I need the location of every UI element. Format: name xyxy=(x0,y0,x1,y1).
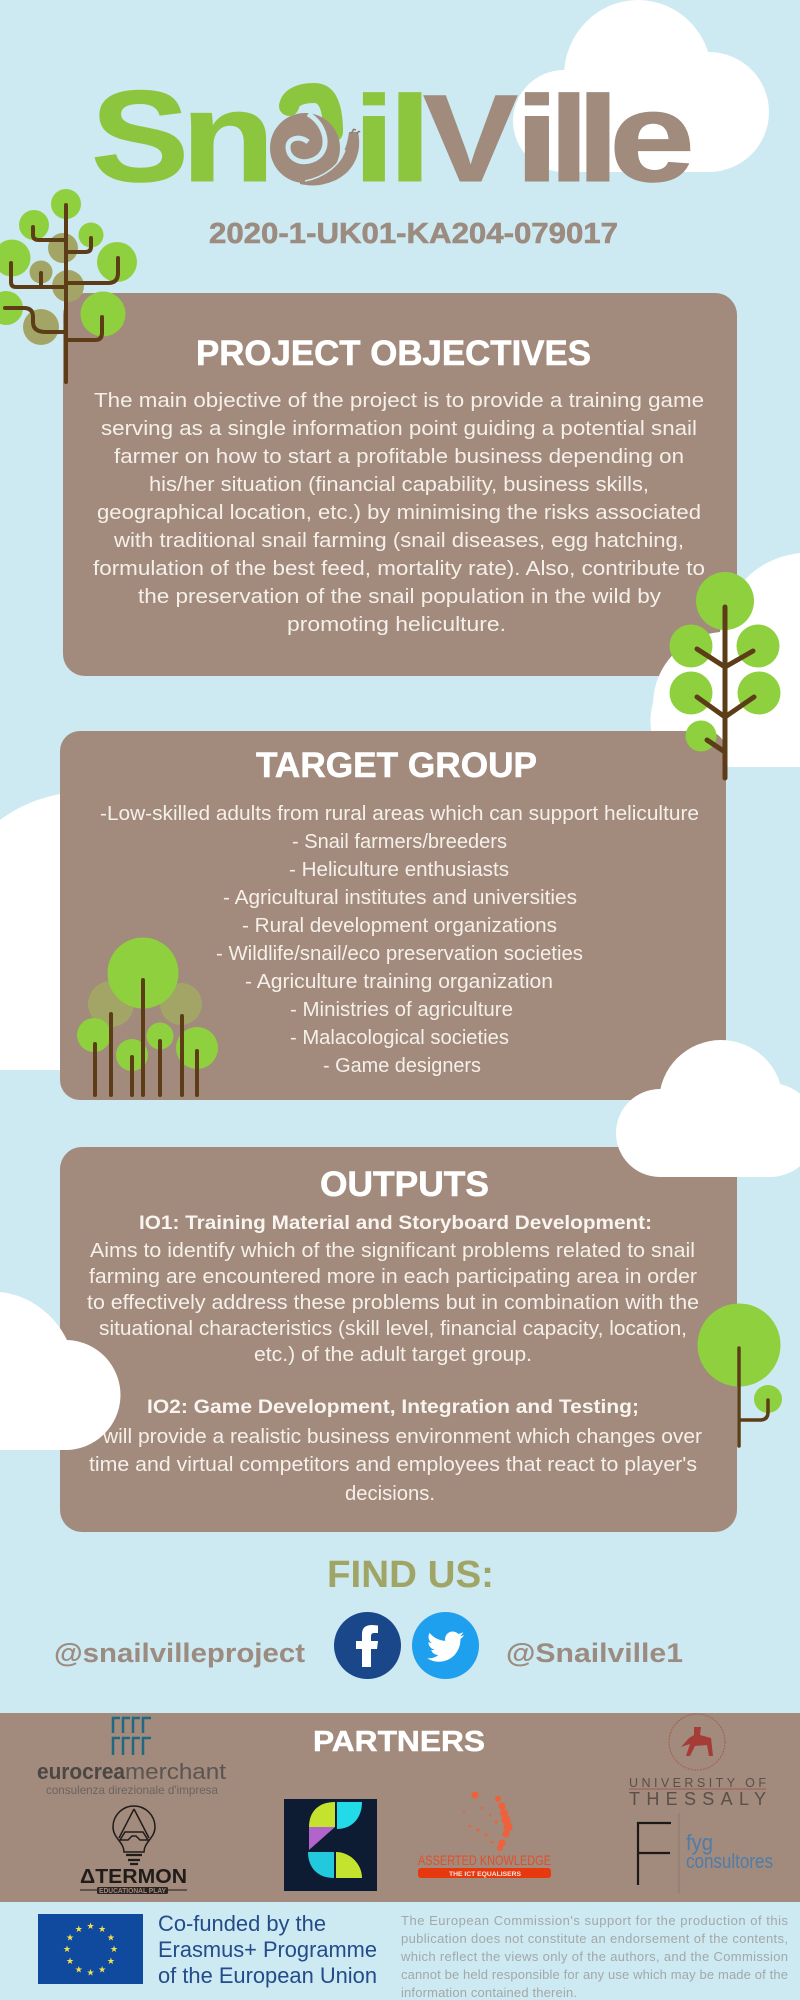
heading: find us: FIND US: xyxy=(327,1554,494,1596)
icon: twitter xyxy=(412,1612,479,1679)
text: disclaimer: cannot be held responsible for any use which may be made of the xyxy=(401,1967,788,1982)
body text: objectives xyxy=(93,389,705,636)
list: target groups: - Rural development organizations xyxy=(242,914,557,937)
cloud: right of objectives xyxy=(650,553,800,767)
icon: EU flag: ★ xyxy=(110,1944,118,1954)
list: target groups: - Malacological societies xyxy=(290,1026,509,1049)
logo letter: a as green arc xyxy=(289,93,333,132)
icon: EU flag: ★ xyxy=(86,1968,95,1978)
text: erasmus co-funding xyxy=(158,1911,377,1988)
icon: EU flag: ★ xyxy=(75,1964,83,1974)
text: disclaimer xyxy=(400,1913,788,2000)
logo: asserted knowledge: ASSERTED KNOWLEDGE xyxy=(418,1852,551,1868)
list: target groups: - Wildlife/snail/eco preservation societies xyxy=(216,942,583,965)
logo: university of thessaly: UNIVERSITY OF xyxy=(629,1776,766,1790)
icon: EU flag: ★ xyxy=(86,1921,95,1931)
tree: right of outputs xyxy=(698,1304,782,1446)
cloud: left of target group xyxy=(0,794,100,1070)
subheading: IO1: IO1: Training Material and Storyboard Development: xyxy=(139,1213,652,1234)
logo: asserted knowledge: THE ICT EQUALISERS xyxy=(449,1871,522,1878)
icon: EU flag: ★ xyxy=(98,1964,106,1974)
logo letters: il xyxy=(353,71,432,207)
heading: project objectives: PROJECT OBJECTIVES xyxy=(196,334,591,373)
project code: 2020-1-UK01-KA204-079017 xyxy=(209,218,618,250)
text: disclaimer: information contained therein. xyxy=(401,1985,577,2000)
logo: university of thessaly xyxy=(629,1714,766,1809)
icon: EU flag: ★ xyxy=(107,1932,115,1942)
body text: IO1 xyxy=(87,1239,699,1366)
logo: fyg consultores xyxy=(638,1813,773,1893)
logo: colourful E xyxy=(284,1799,377,1891)
list: target groups: -Low-skilled adults from rural areas which can support heliculture xyxy=(100,802,699,825)
body text: objectives: geographical location, etc.) by minimising the risks associated xyxy=(97,501,701,524)
cloud: right of outputs xyxy=(616,1040,800,1177)
logo letters: Ville: l xyxy=(549,71,589,207)
list: target groups: - Agriculture training organization xyxy=(245,970,553,993)
logo: asserted knowledge xyxy=(418,1792,551,1878)
body text: objectives: serving as a single information point guiding a potential snail xyxy=(101,417,697,440)
logo: fyg consultores: fyg xyxy=(686,1830,713,1855)
icon: snail xyxy=(270,113,360,185)
heading: outputs: OUTPUTS xyxy=(320,1165,489,1204)
body text: IO1: to effectively address these problems but in combination with the xyxy=(87,1291,699,1314)
text: project objectives xyxy=(93,334,705,636)
text: outputs xyxy=(87,1165,702,1505)
list: target groups: - Agricultural institutes and universities xyxy=(223,886,577,909)
icon: EU flag: ★ xyxy=(66,1956,74,1966)
icon: facebook xyxy=(334,1612,401,1679)
tree: right of objectives xyxy=(670,572,780,778)
body text: objectives: promoting heliculture. xyxy=(287,613,506,636)
panel: project objectives background xyxy=(63,293,737,676)
icon: EU flag: ★ xyxy=(107,1956,115,1966)
icon: EU flag xyxy=(38,1914,143,1984)
panel: partners xyxy=(0,1713,800,1902)
logo letters: Sn xyxy=(91,63,275,209)
logo: fyg consultores: consultores xyxy=(686,1851,773,1873)
body text: objectives: the preservation of the snail population in the wild by xyxy=(138,585,662,608)
body text: IO2 xyxy=(89,1425,702,1505)
logo letters: il: i xyxy=(353,71,395,207)
logo letters: Ville: l xyxy=(576,71,620,207)
handle: twitter: @Snailville1 xyxy=(506,1638,683,1668)
text: disclaimer: The European Commission's support for the production of this xyxy=(401,1913,788,1928)
handle: facebook: @snailvilleproject xyxy=(54,1638,305,1668)
logo letters: Ville: i xyxy=(514,71,560,207)
body text: IO1: etc.) of the adult target group. xyxy=(254,1343,532,1366)
body text: IO2: decisions. xyxy=(345,1482,435,1505)
tree: top left xyxy=(0,189,137,382)
body text: IO2: time and virtual competitors and employees that react to player's xyxy=(89,1453,697,1476)
heading: target group: TARGET GROUP xyxy=(256,746,537,785)
icon: EU flag: ★ xyxy=(66,1932,74,1942)
cloud: top right xyxy=(513,0,769,172)
logo: eurocrea merchant xyxy=(37,1718,226,1797)
body text: objectives: with traditional snail farming (snail diseases, egg hatching, xyxy=(113,529,684,552)
body text: objectives: farmer on how to start a profitable business depending on xyxy=(114,445,684,468)
logo: atermon xyxy=(80,1806,187,1895)
subheading: IO2: IO2: Game Development, Integration and Testing; xyxy=(147,1397,639,1418)
list: target groups: - Ministries of agriculture xyxy=(290,998,513,1021)
logo letters: Ville xyxy=(423,66,695,209)
body text: objectives: formulation of the best feed, mortality rate). Also, contribute to xyxy=(93,557,705,580)
panel: target group background xyxy=(60,731,726,1100)
logo: atermon: EDUCATIONAL PLAY xyxy=(99,1888,166,1895)
body text: objectives: The main objective of the project is to provide a training game xyxy=(94,389,704,412)
logo: eurocrea merchant: merchant xyxy=(125,1759,226,1784)
logo: atermon: ΔTERMON xyxy=(80,1866,187,1888)
list: target groups: - Heliculture enthusiasts xyxy=(289,858,509,881)
body text: IO1: farming are encountered more in each participating area in order xyxy=(89,1265,697,1288)
logo letters: Sn: n xyxy=(181,66,275,209)
logo: university of thessaly: THESSALY xyxy=(629,1789,766,1809)
text: target group xyxy=(100,746,699,1077)
cloud: left of outputs xyxy=(0,1292,120,1450)
logo letters: il: l xyxy=(388,71,432,207)
panel: outputs background xyxy=(60,1147,737,1532)
list: target groups: - Game designers xyxy=(323,1054,481,1077)
list: target groups: - Snail farmers/breeders xyxy=(292,830,507,853)
trees: target group grove xyxy=(77,938,218,1095)
icon: EU flag: ★ xyxy=(75,1924,83,1934)
logo: eurocrea merchant: eurocrea xyxy=(37,1759,126,1784)
icon: EU flag: ★ xyxy=(98,1924,106,1934)
text: erasmus co-funding: Erasmus+ Programme xyxy=(158,1937,377,1962)
list: target groups xyxy=(100,802,699,1077)
logo letters: Ville: e xyxy=(609,66,695,209)
body text: objectives: his/her situation (financial capability, business skills, xyxy=(149,473,649,496)
logo: eurocrea merchant: consulenza direzionale d'impresa xyxy=(46,1783,218,1797)
text: disclaimer: publication does not constitute an endorsement of the contents, xyxy=(401,1931,788,1946)
heading: partners: PARTNERS xyxy=(313,1726,485,1758)
text: erasmus co-funding: Co-funded by the xyxy=(158,1911,326,1936)
body text: IO1: situational characteristics (skill level, financial capacity, location, xyxy=(99,1317,687,1340)
text: disclaimer: which reflect the views only of the authors, and the Commission xyxy=(400,1949,788,1964)
text: erasmus co-funding: of the European Union xyxy=(158,1963,377,1988)
logo letters: Sn: S xyxy=(91,63,189,209)
icon: EU flag: ★ xyxy=(63,1944,71,1954)
logo: SnailVille xyxy=(91,63,695,209)
body text: IO2: will provide a realistic business environment which changes over xyxy=(102,1425,702,1448)
body text: IO1: Aims to identify which of the significant problems related to snail xyxy=(90,1239,695,1262)
logo letters: Ville: V xyxy=(423,70,518,208)
